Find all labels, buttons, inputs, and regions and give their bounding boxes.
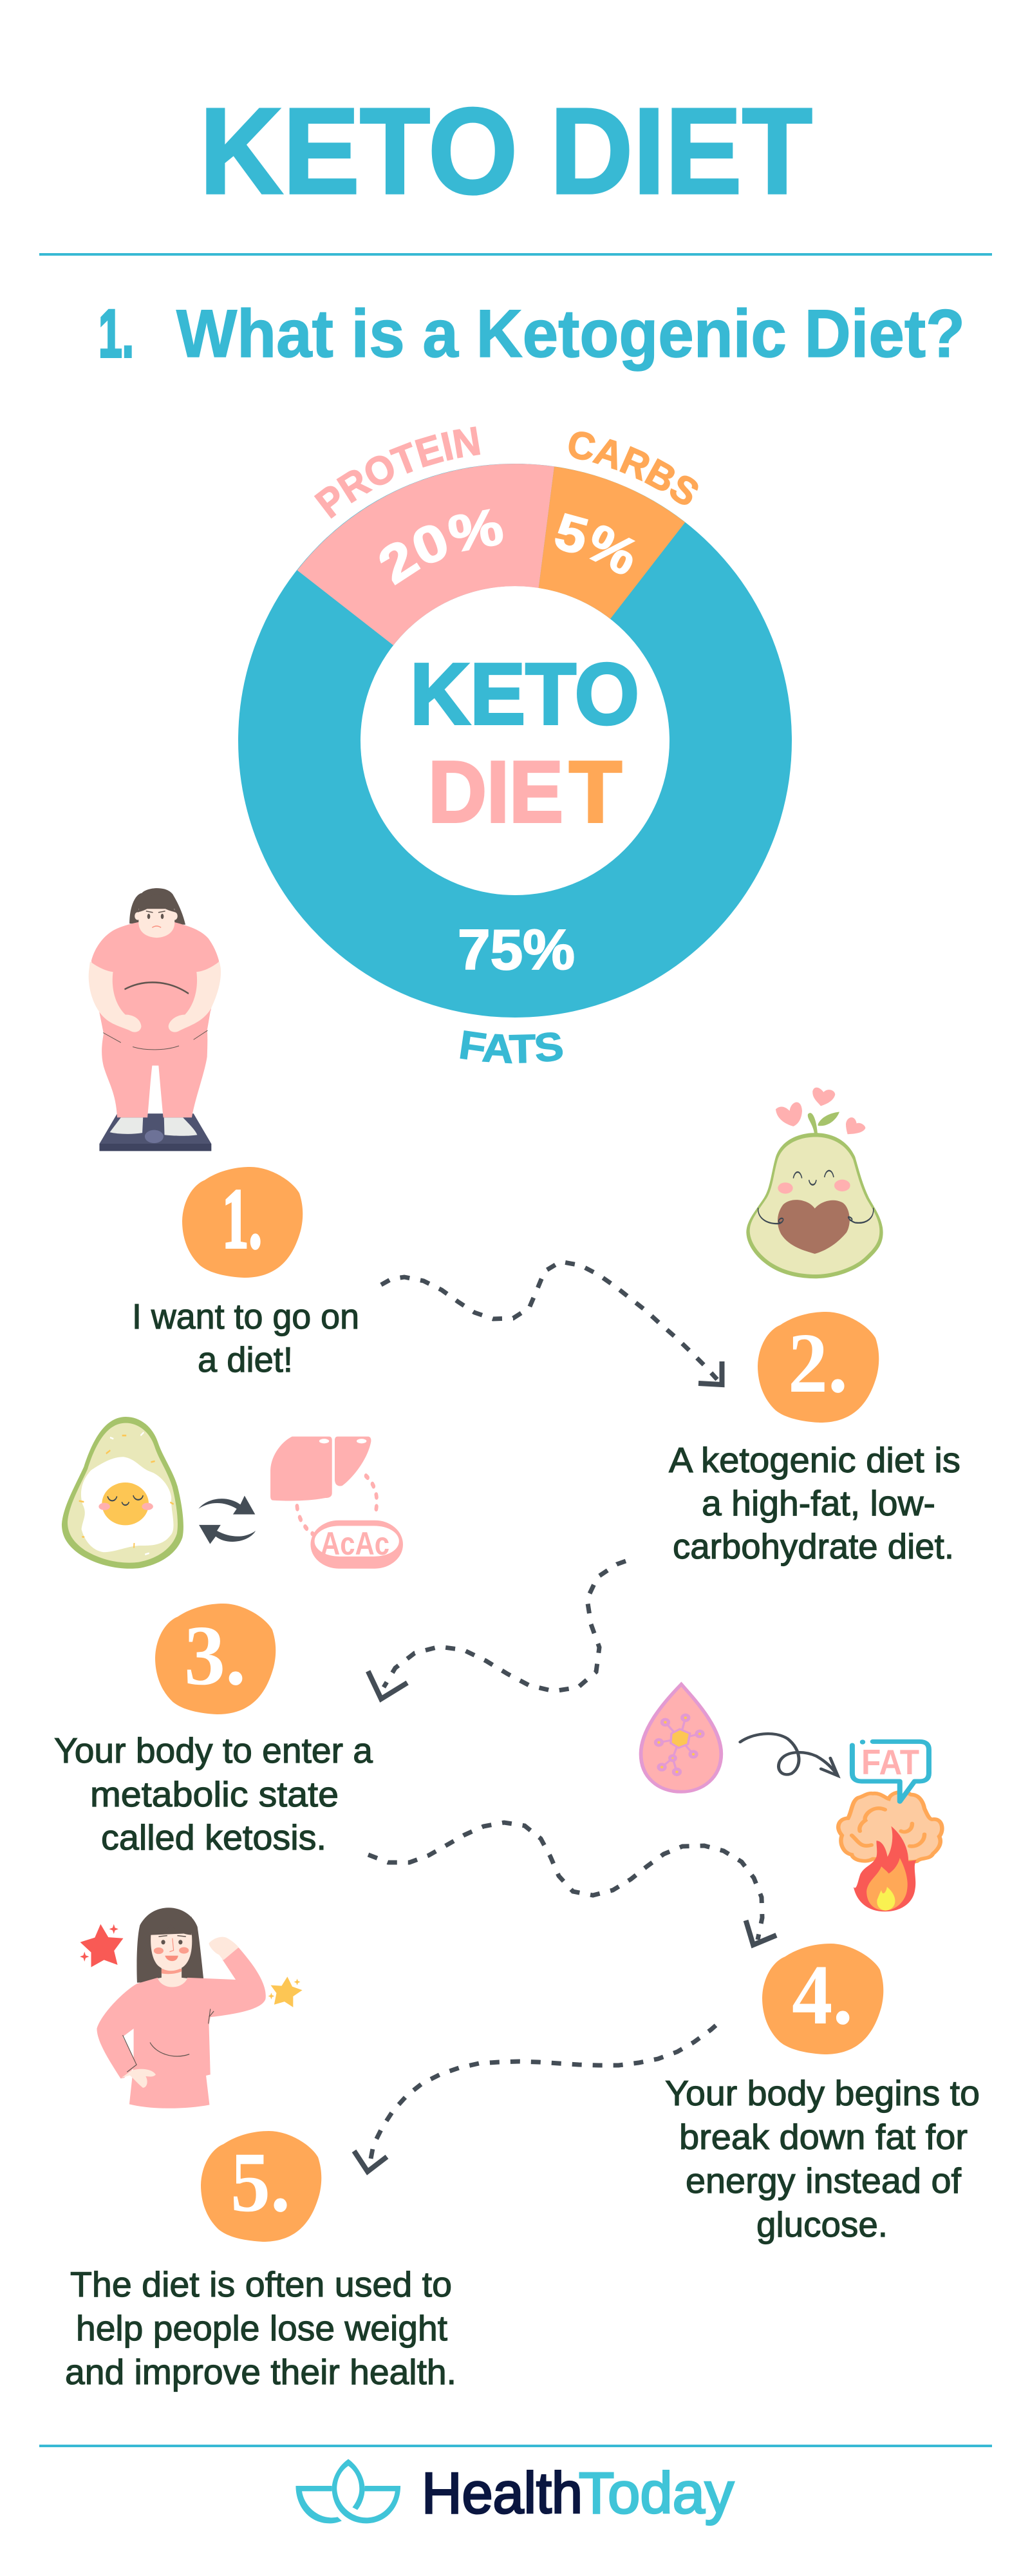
step 5 badge: 5. [230,2134,290,2230]
step 4 text [665,2073,980,2244]
step 3 text: Your body to enter a [54,1730,373,1770]
icon: liver producing AcAc [270,1437,403,1569]
step 4 text: Your body begins to [665,2073,980,2113]
arrow: curly arrow from drop to fat [740,1734,838,1776]
value: 5%: 5% [555,513,635,574]
value: 75%: 75% [458,918,575,981]
step 3 text: metabolic state [90,1774,339,1814]
label: protein: PROTEIN [314,426,480,519]
donut chart: macronutrient split [272,426,757,1064]
step 4 badge: 4. [792,1947,853,2042]
carbs segment [539,466,685,619]
logo text: Health: Health [422,2461,583,2526]
label: AcAc: AcAc [321,1526,389,1562]
icon: woman on scale [89,888,221,1151]
step 5 text [65,2264,456,2392]
step 2 text: A ketogenic diet is [669,1440,960,1480]
step 2 text [669,1440,960,1566]
step 5 text: and improve their health. [65,2352,456,2392]
value: 20%: 20% [380,509,503,585]
step 4 text: break down fat for [679,2117,968,2157]
icon: burning fat brain [838,1739,942,1911]
step 4 text: energy instead of [686,2161,962,2201]
step 2 badge: 2. [788,1315,848,1410]
logo text: Today: Today [579,2461,734,2526]
icon: avocado with egg [62,1417,183,1569]
step 2 badge [758,1312,879,1423]
step 5 badge [201,2131,321,2242]
arrow: step 2 to step 3 [368,1561,626,1699]
label: carbs: CARBS [569,431,698,505]
step 5 text: help people lose weight [76,2308,447,2348]
step 4 text: glucose. [756,2204,888,2244]
logo icon: lotus [295,2459,400,2523]
step 3 text: called ketosis. [101,1817,326,1857]
step 1 text: a diet! [198,1340,293,1379]
centre text: diet: T [569,743,622,840]
label: fats: FATS [460,1030,563,1064]
step 1 badge: 1. [222,1171,262,1266]
step 3 text [54,1730,373,1857]
logo: HealthToday [295,2459,734,2526]
heading: what is a ketogenic diet: 1. [98,296,134,372]
icon: ketone blood drop [641,1684,721,1792]
icon: strong woman with stars [80,1908,303,2108]
step 1 badge [182,1167,303,1278]
step 2 text: a high-fat, low- [702,1483,935,1523]
step 1 text [132,1296,359,1379]
step 3 badge: 3. [184,1607,246,1703]
arrow: step 3 to step 4 [368,1823,776,1945]
step 4 badge [762,1944,883,2054]
icon: happy avocado with hearts [746,1088,883,1278]
step 2 text: carbohydrate diet. [673,1526,954,1566]
icon: swap arrows [198,1495,256,1544]
centre text: diet: DIE [428,743,563,840]
step 3 badge [155,1604,276,1714]
step 1 text: I want to go on [132,1296,359,1336]
protein segment [297,464,554,645]
title: KETO DIET [200,83,812,220]
step 5 text: The diet is often used to [70,2264,452,2304]
centre text: keto: KETO [410,645,639,743]
label: FAT: FAT [861,1742,919,1782]
heading: what is a ketogenic diet: What is a Ketogenic Diet? [176,296,965,372]
arrow: step 1 to step 2 [381,1262,722,1385]
arrow: step 4 to step 5 [354,2025,716,2172]
